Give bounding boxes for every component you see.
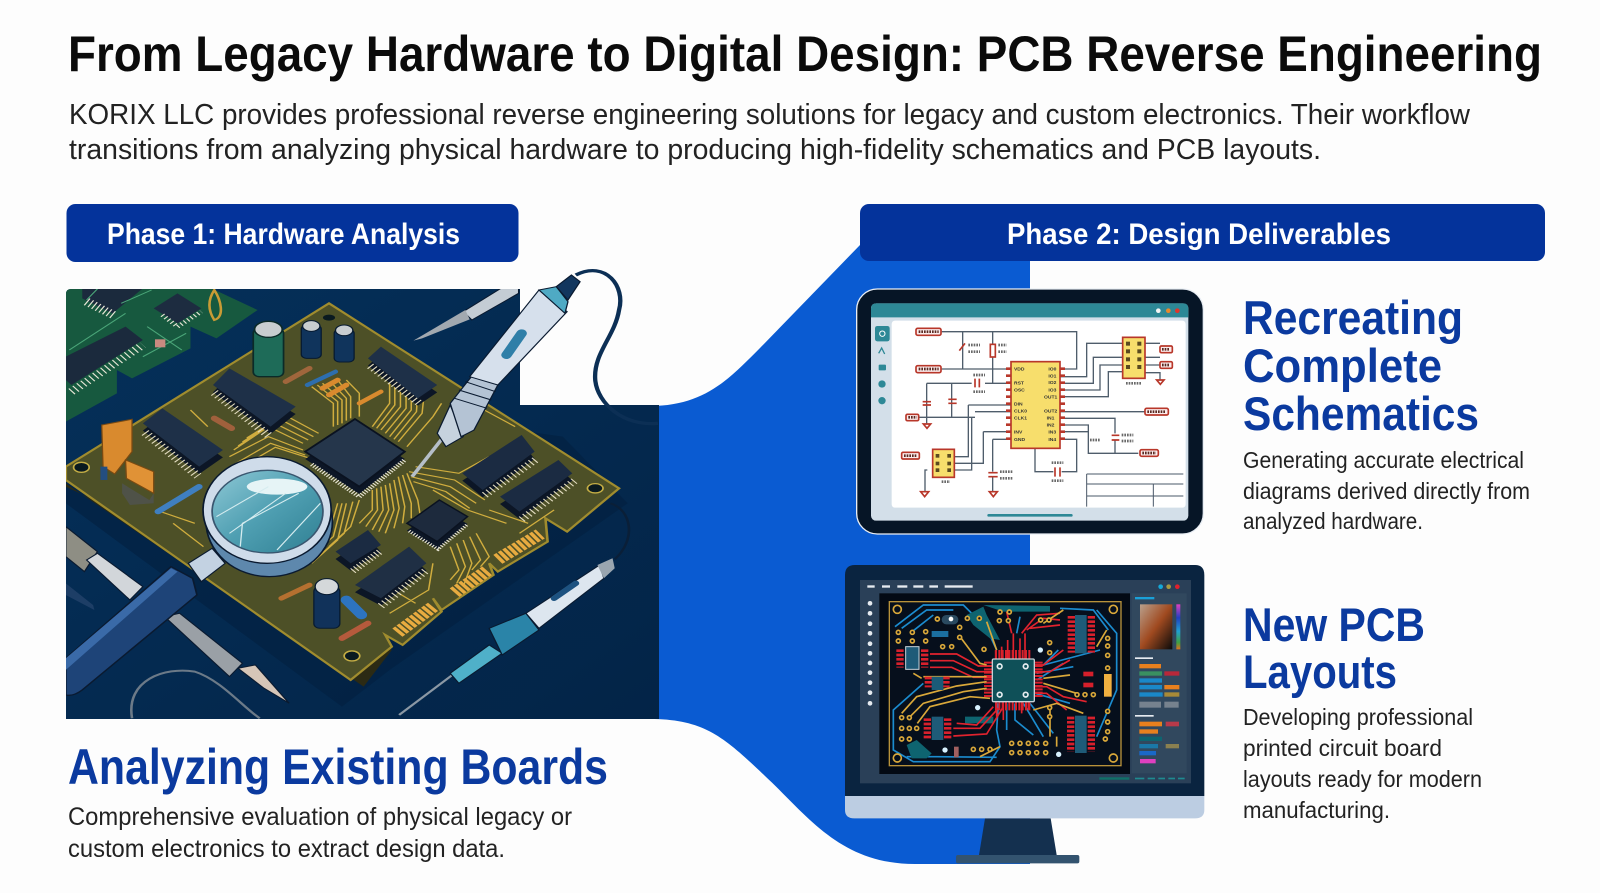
main chip: IO2 xyxy=(1048,380,1057,386)
monitor stand xyxy=(956,818,1079,863)
component value labels xyxy=(942,345,1142,482)
section: new PCB layouts: layouts ready for modern xyxy=(1243,766,1482,792)
section: analyzing existing boards: Comprehensive evaluation of physical legacy or xyxy=(68,803,572,831)
main chip: CLK0 xyxy=(1014,409,1027,415)
main chip: DIN xyxy=(1014,401,1023,407)
phase 2 banner xyxy=(860,204,1545,261)
blue traces xyxy=(893,605,1117,762)
section: analyzing existing boards xyxy=(68,739,608,863)
net labels xyxy=(902,328,1172,459)
phase 1 banner: Phase 1: Hardware Analysis xyxy=(107,218,460,251)
phase 2 banner: Phase 2: Design Deliverables xyxy=(1007,218,1391,251)
bottom-right probe xyxy=(399,503,629,715)
section: recreating complete schematics xyxy=(1243,291,1530,534)
yellow traces xyxy=(902,610,1107,757)
main chip: OUT2 xyxy=(1044,408,1058,414)
lower-left probe handle xyxy=(66,548,225,695)
mounting holes xyxy=(74,462,89,472)
PCB canvas xyxy=(879,593,1130,774)
section: recreating complete schematics: diagrams derived directly from xyxy=(1243,478,1530,504)
passive symbols xyxy=(921,343,1164,497)
main chip: RST xyxy=(1014,381,1024,387)
main chip xyxy=(1008,362,1063,448)
section: new PCB layouts xyxy=(1243,598,1482,823)
menu bar xyxy=(867,584,1180,589)
status bar xyxy=(1099,777,1185,780)
sidebar icons xyxy=(875,326,890,404)
main chip: IO0 xyxy=(1048,367,1057,373)
chip shadows xyxy=(143,354,572,606)
section: new PCB layouts: New PCB xyxy=(1243,598,1425,651)
intro text xyxy=(69,99,1471,166)
main chip: OSC xyxy=(1014,387,1025,393)
main chip: CLK1 xyxy=(1014,415,1027,421)
section: new PCB layouts: Developing professional xyxy=(1243,704,1473,730)
section: recreating complete schematics: analyzed hardware. xyxy=(1243,508,1423,534)
soldering pen xyxy=(412,271,658,477)
thin wire xyxy=(131,671,260,718)
section: new PCB layouts: printed circuit board xyxy=(1243,735,1442,761)
glowing vias xyxy=(942,647,1061,757)
gold edge fingers xyxy=(397,534,540,633)
main chip: GND xyxy=(1014,437,1025,443)
schematic wires xyxy=(918,332,1160,492)
section: analyzing existing boards: Analyzing Existing Boards xyxy=(68,739,608,795)
gold pads xyxy=(893,605,1117,762)
section: analyzing existing boards: custom electronics to extract design data. xyxy=(68,835,505,863)
capacitors xyxy=(253,328,284,377)
intro text: KORIX LLC provides professional reverse engineering solutions for legacy and custom electronics. Their workflow xyxy=(69,99,1471,131)
main chip: IN3 xyxy=(1048,429,1056,435)
main chip: IN1 xyxy=(1047,415,1055,421)
red traces xyxy=(930,612,1087,736)
intro text: transitions from analyzing physical hardware to producing high-fidelity schematics and PCB layouts. xyxy=(69,134,1321,166)
section: recreating complete schematics: Complete xyxy=(1243,339,1442,392)
section: new PCB layouts: Layouts xyxy=(1243,645,1397,698)
section: recreating complete schematics: Generating accurate electrical xyxy=(1243,447,1524,473)
illustration: circuit board under inspection xyxy=(66,277,659,719)
components xyxy=(900,615,1112,757)
shadow under board xyxy=(66,433,598,704)
blue connector band xyxy=(650,245,1030,864)
section: new PCB layouts: manufacturing. xyxy=(1243,797,1390,823)
section: recreating complete schematics: Recreating xyxy=(1243,291,1463,344)
small parts xyxy=(158,368,381,638)
chips xyxy=(214,393,269,436)
side panel xyxy=(1132,593,1187,773)
pen nib xyxy=(238,665,289,703)
device: monitor with PCB layout xyxy=(845,565,1204,863)
main board xyxy=(66,303,619,687)
tool dots xyxy=(868,601,872,706)
toolbar xyxy=(871,303,1188,317)
small chips xyxy=(933,337,1145,477)
metal rods lower left xyxy=(66,527,242,677)
main chip: OUT1 xyxy=(1044,394,1058,400)
device: tablet with schematic xyxy=(857,289,1203,534)
teal copper xyxy=(907,605,1050,758)
second tip top xyxy=(414,289,520,341)
orange components xyxy=(102,419,132,474)
centre chip xyxy=(992,659,1034,702)
green board xyxy=(66,287,258,422)
main chip: INV xyxy=(1014,429,1023,435)
main chip: VDD xyxy=(1014,367,1025,373)
main chip: IO3 xyxy=(1048,387,1057,393)
phase 1 banner xyxy=(66,204,518,262)
traces xyxy=(156,380,554,613)
section: recreating complete schematics: Schematics xyxy=(1243,387,1479,440)
main chip: IN2 xyxy=(1047,423,1055,429)
main chip: IO1 xyxy=(1048,373,1057,379)
main chip: IN4 xyxy=(1048,437,1056,443)
magnifying glass xyxy=(203,457,332,577)
title block xyxy=(1087,474,1183,507)
